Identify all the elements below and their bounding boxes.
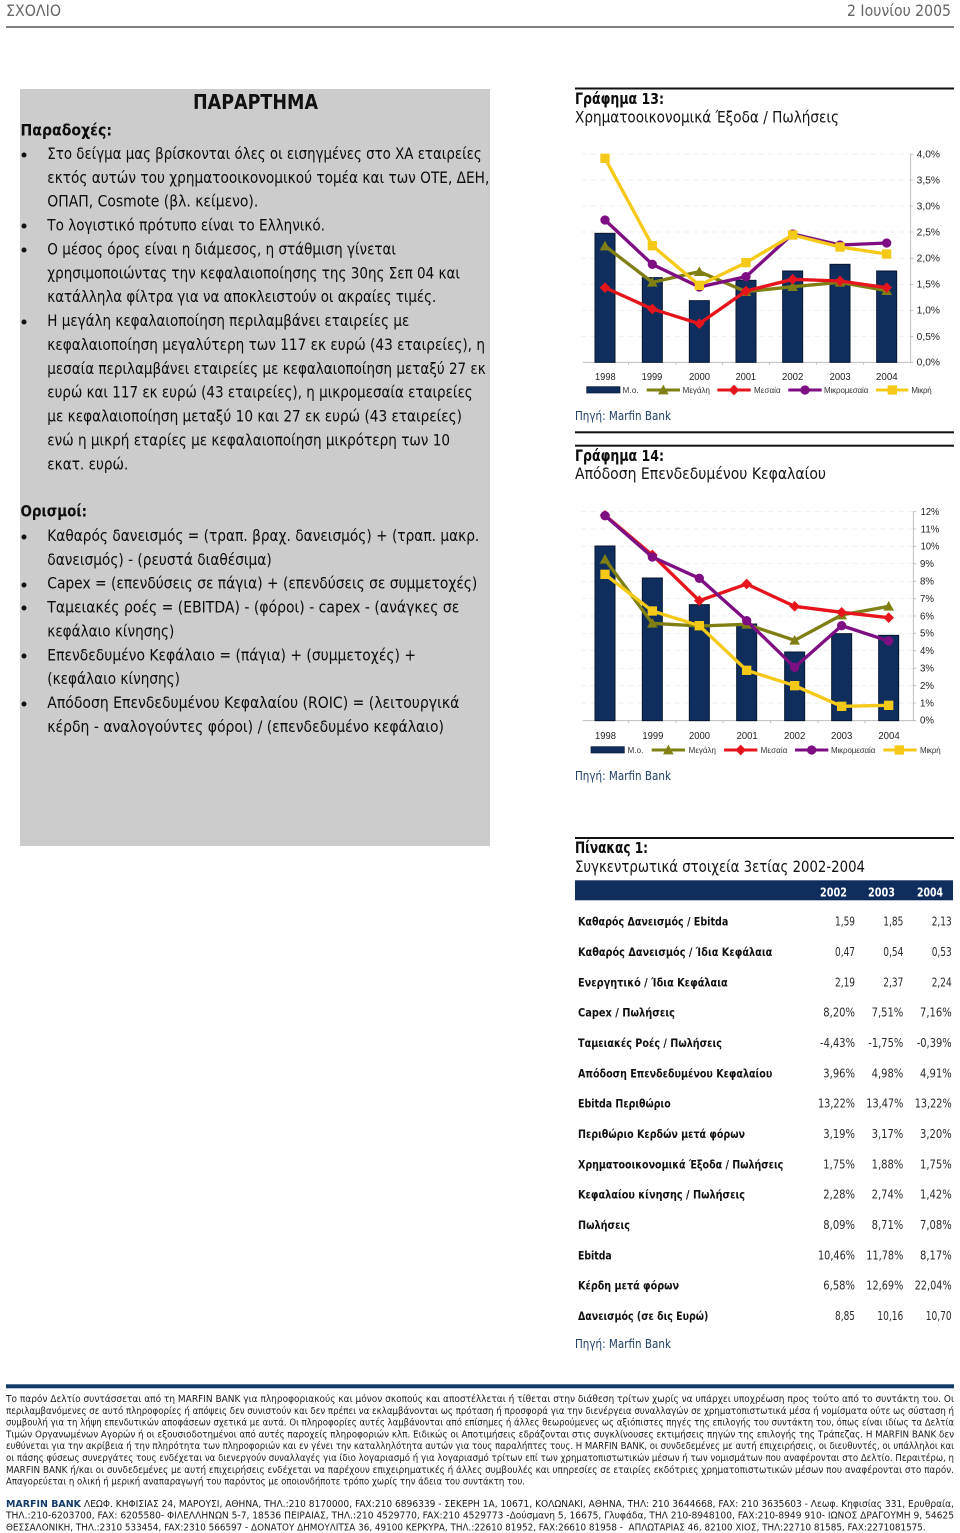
footer rule (6, 1384, 954, 1388)
table row labels: Ebitda Περιθώριο (578, 1097, 671, 1111)
y axis labels: 8% (920, 577, 934, 588)
y axis labels: 2% (920, 681, 934, 692)
definitions list: (κεφάλαιο κίνησης) (47, 669, 180, 688)
table header row: 2004 (917, 885, 943, 899)
definitions list: Capex = (επενδύσεις σε πάγια) + (επενδύσεις σε συμμετοχές) (47, 574, 477, 593)
definitions list (22, 526, 479, 736)
assumptions list: Το λογιστικό πρότυπο είναι το Ελληνικό. (46, 216, 325, 235)
x axis labels (595, 372, 898, 383)
heading: assumptions: Παραδοχές: (20, 122, 112, 140)
y axis labels: 0% (920, 716, 934, 727)
table row labels: Περιθώριο Κερδών μετά φόρων (578, 1127, 745, 1141)
panel: appendix (20, 89, 490, 846)
table values: 11,78% (866, 1248, 903, 1262)
chart 13 plot (582, 149, 940, 395)
x axis labels: 2000 (689, 731, 710, 742)
table values: 2,74% (872, 1188, 903, 1202)
table values: 13,22% (818, 1097, 855, 1111)
x axis labels: 1998 (595, 372, 616, 383)
assumptions list: ενώ η μικρή εταρίες με κεφαλαιοποίηση μικρότερη των 10 (47, 430, 450, 450)
contact details (5, 1498, 954, 1533)
bars: average (595, 233, 897, 362)
line: small-mid cap (605, 220, 887, 287)
x axis labels: 2003 (831, 731, 853, 742)
definitions list: κεφάλαιο κίνησης) (47, 621, 174, 640)
y axis labels: 9% (920, 559, 934, 570)
legend: Μεγάλη (683, 386, 710, 395)
assumptions list: κατάλληλα φίλτρα για να αποκλειστούν οι ακραίες τιμές. (47, 287, 436, 306)
definitions list: Επενδεδυμένο Κεφάλαιο = (πάγια) + (συμμετοχές) + (47, 645, 416, 664)
table values: 2,37 (883, 975, 903, 989)
assumptions list: κεφαλαιοποίηση μεγαλύτερη των 117 εκ ευρώ (43 εταιρείες), η (47, 335, 485, 354)
definitions list: δανεισμός) - (ρευστά διαθέσιμα) (47, 550, 272, 569)
table values: 3,17% (872, 1127, 903, 1141)
y axis labels: 2,5% (917, 227, 940, 238)
legend: Μεγάλη (689, 746, 716, 755)
y axis labels: 1% (920, 698, 934, 709)
table values: 1,59 (835, 915, 855, 929)
table row labels (578, 915, 783, 1323)
table values: 8,20% (823, 1006, 855, 1020)
table values (818, 915, 952, 1323)
table values: 8,85 (835, 1309, 855, 1323)
table values: 13,47% (866, 1097, 903, 1111)
line: small cap (605, 574, 889, 706)
page header: ΣΧΟΛΙΟ (6, 1, 61, 20)
assumptions list: Ο μέσος όρος είναι η διάμεσος, η στάθμιση γίνεται (47, 239, 396, 258)
table values: 4,98% (872, 1066, 903, 1080)
table values: -4,43% (820, 1036, 855, 1050)
panel: table 1 (575, 837, 954, 1351)
x axis labels (595, 731, 900, 742)
line: small-mid cap (605, 516, 889, 667)
disclaimer text (5, 1393, 955, 1488)
heading: definitions: Ορισμοί: (20, 502, 87, 520)
table values: 7,08% (920, 1218, 952, 1232)
chart 14 plot (582, 507, 941, 755)
table row labels: Κεφαλαίου κίνησης / Πωλήσεις (578, 1188, 745, 1202)
assumptions list: με κεφαλαιοποίηση μεταξύ 10 και 27 εκ ευρώ (43 εταιρείες) (47, 407, 462, 426)
table values: 1,85 (883, 915, 903, 929)
x axis labels: 2001 (737, 731, 758, 742)
table row labels: Καθαρός Δανεισμός / Ίδια Κεφάλαια (578, 945, 772, 959)
legend: Μ.ο. (628, 746, 643, 755)
contact details: MARFIN BANK (6, 1499, 82, 1510)
y axis labels: 7% (920, 594, 934, 605)
table values: 2,24 (932, 975, 952, 989)
appendix title: ΠΑΡΑΡΤΗΜΑ (193, 90, 318, 114)
table values: 10,46% (818, 1248, 855, 1262)
table values: 0,54 (883, 945, 903, 959)
assumptions list: ευρώ και 117 εκ ευρώ (43 εταιρείες), η μικρομεσαία εταιρείες (47, 383, 473, 402)
assumptions list: μεσαία περιλαμβάνει εταιρείες με κεφαλαιοποίηση μεταξύ 27 εκ (47, 359, 486, 378)
table row labels: Χρηματοοικονομικά Έξοδα / Πωλήσεις (578, 1157, 783, 1171)
assumptions list: χρησιμοποιώντας την κεφαλαιοποίησης της 30ης Σεπ 04 και (47, 263, 460, 282)
table values: 0,47 (835, 945, 855, 959)
y axis labels: 11% (921, 524, 939, 535)
table values: 1,88% (872, 1157, 903, 1171)
table values: 6,58% (823, 1279, 855, 1293)
legend: Μεσαία (761, 746, 788, 755)
table header row: 2002 (820, 885, 847, 899)
line: large cap (605, 559, 889, 640)
table values: 1,75% (823, 1157, 855, 1171)
table title: Συγκεντρωτικά στοιχεία 3ετίας 2002-2004 (575, 857, 865, 876)
table values: 1,75% (920, 1157, 952, 1171)
chart 13 title: Χρηματοοικονομικά Έξοδα / Πωλήσεις (575, 107, 839, 126)
x axis labels: 2000 (689, 372, 710, 383)
y axis labels: 0,5% (917, 332, 940, 343)
table values: 7,51% (872, 1006, 903, 1020)
line: mid cap (605, 279, 887, 324)
disclaimer text: Απαγορεύεται η ολική ή μερική αναπαραγωγή του παρόντος με οποιονδήποτε τρόπο χωρίς την άδεια του συντάκτη του. (6, 1476, 525, 1488)
assumptions list: εκατ. ευρώ. (47, 454, 128, 473)
line: mid cap (605, 515, 889, 618)
line: large cap (605, 246, 887, 292)
x axis labels: 1998 (595, 731, 616, 742)
table values: 8,71% (872, 1218, 903, 1232)
y axis labels: 5% (920, 629, 934, 640)
y axis labels: 3,5% (917, 175, 940, 186)
y axis labels: 4% (920, 646, 934, 657)
x axis labels: 2004 (876, 372, 898, 383)
line: small cap (605, 158, 887, 285)
table values: -1,75% (868, 1036, 903, 1050)
table values: 8,09% (823, 1218, 855, 1232)
x axis labels: 2003 (830, 372, 851, 383)
table values: 13,22% (915, 1097, 952, 1111)
definitions list: Ταμειακές ροές = (EBITDA) - (φόροι) - capex - (ανάγκες σε (46, 598, 459, 616)
table heading: Πίνακας 1: (575, 839, 648, 857)
y axis labels: 6% (920, 611, 934, 622)
table values: 12,69% (866, 1279, 903, 1293)
table values: 3,19% (823, 1127, 855, 1141)
table row labels: Ebitda (578, 1248, 612, 1262)
y axis labels: 3% (920, 664, 934, 675)
x axis labels: 1999 (642, 731, 664, 742)
legend: Μικρή (920, 746, 941, 755)
x axis labels: 1999 (642, 372, 663, 383)
y axis labels: 4,0% (917, 149, 940, 160)
x axis labels: 2001 (736, 372, 756, 383)
legend: Μικρή (911, 386, 932, 395)
panel: chart 14 (575, 445, 954, 783)
legend: Μ.ο. (623, 386, 639, 395)
assumptions list: ΟΠΑΠ, Cosmote (βλ. κείμενο). (47, 192, 258, 211)
table values: 2,28% (823, 1188, 855, 1202)
chart 14 source: Πηγή: Marfin Bank (575, 768, 672, 783)
table values: 4,91% (920, 1066, 952, 1080)
table header row: 2003 (868, 885, 895, 899)
chart 13 heading: Γράφημα 13: (575, 90, 664, 108)
x axis labels: 2002 (782, 372, 804, 383)
table values: 2,13 (932, 915, 952, 929)
legend: Μικρομεσαία (831, 746, 876, 755)
table row labels: Δανεισμός (σε δις Ευρώ) (578, 1309, 708, 1323)
table values: 3,96% (823, 1066, 855, 1080)
table row labels: Capex / Πωλήσεις (578, 1006, 675, 1020)
y axis labels: 2,0% (917, 254, 940, 265)
table values: 1,42% (920, 1188, 952, 1202)
table row labels: Ενεργητικό / Ίδια Κεφάλαια (578, 975, 728, 989)
legend (591, 746, 941, 755)
table values: 2,19 (835, 975, 855, 989)
table source: Πηγή: Marfin Bank (575, 1336, 672, 1351)
chart 13 source: Πηγή: Marfin Bank (575, 408, 672, 423)
legend: Μικρομεσαία (824, 386, 869, 395)
y axis labels: 3,0% (917, 201, 940, 212)
x axis labels: 2002 (784, 731, 806, 742)
definitions list: κέρδη - αναλογούντες φόροι) / (επενδεδυμένο κεφάλαιο) (47, 717, 444, 736)
table values: 8,17% (920, 1248, 952, 1262)
y axis labels: 1,5% (917, 280, 940, 291)
panel: chart 13 (575, 88, 954, 433)
table values: 0,53 (932, 945, 952, 959)
table row labels: Καθαρός Δανεισμός / Ebitda (578, 915, 728, 929)
assumptions list: Η μεγάλη κεφαλαιοποίηση περιλαμβάνει εταιρείες με (47, 311, 409, 330)
table row labels: Ταμειακές Ροές / Πωλήσεις (578, 1036, 722, 1050)
legend: Μεσαία (754, 386, 781, 395)
x axis labels: 2004 (878, 731, 900, 742)
table row labels: Πωλήσεις (578, 1218, 630, 1232)
y axis labels: 12% (921, 507, 939, 518)
table values: 22,04% (915, 1279, 952, 1293)
definitions list: Καθαρός δανεισμός = (τραπ. βραχ. δανεισμός) + (τραπ. μακρ. (47, 526, 479, 545)
y axis labels (917, 149, 940, 369)
y axis labels (920, 507, 939, 727)
assumptions list (22, 144, 489, 473)
table values: 7,16% (920, 1006, 952, 1020)
table values: 10,16 (877, 1309, 903, 1323)
definitions list: Απόδοση Επενδεδυμένου Κεφαλαίου (ROIC) = (λειτουργικά (47, 693, 459, 712)
assumptions list: εκτός αυτών του χρηματοοικονομικού τομέα και των ΟΤΕ, ΔΕΗ, (47, 168, 489, 187)
table row labels: Απόδοση Επενδεδυμένου Κεφαλαίου (578, 1066, 772, 1080)
table values: -0,39% (917, 1036, 952, 1050)
chart 14 title: Απόδοση Επενδεδυμένου Κεφαλαίου (575, 464, 826, 483)
table row labels: Κέρδη μετά φόρων (578, 1279, 679, 1293)
page header (6, 1, 954, 28)
bars: average (595, 546, 899, 721)
chart 14 heading: Γράφημα 14: (575, 447, 664, 465)
y axis labels: 10% (921, 542, 939, 553)
table values: 3,20% (920, 1127, 952, 1141)
assumptions list: Στο δείγμα μας βρίσκονται όλες οι εισηγμένες στο ΧΑ εταιρείες (47, 144, 482, 163)
y axis labels: 0,0% (917, 358, 940, 369)
table values: 10,70 (926, 1309, 952, 1323)
legend (587, 386, 932, 395)
table header row (575, 880, 953, 900)
y axis labels: 1,0% (917, 306, 940, 317)
